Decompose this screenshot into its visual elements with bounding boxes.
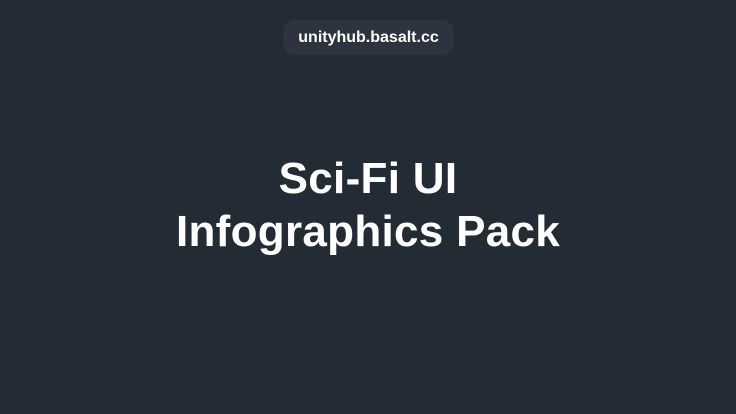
domain pill: unityhub.basalt.cc <box>298 29 439 46</box>
title: Infographics Pack <box>176 207 560 256</box>
title: Sci-Fi UI <box>279 154 457 203</box>
title <box>176 154 560 256</box>
domain pill <box>283 20 454 55</box>
